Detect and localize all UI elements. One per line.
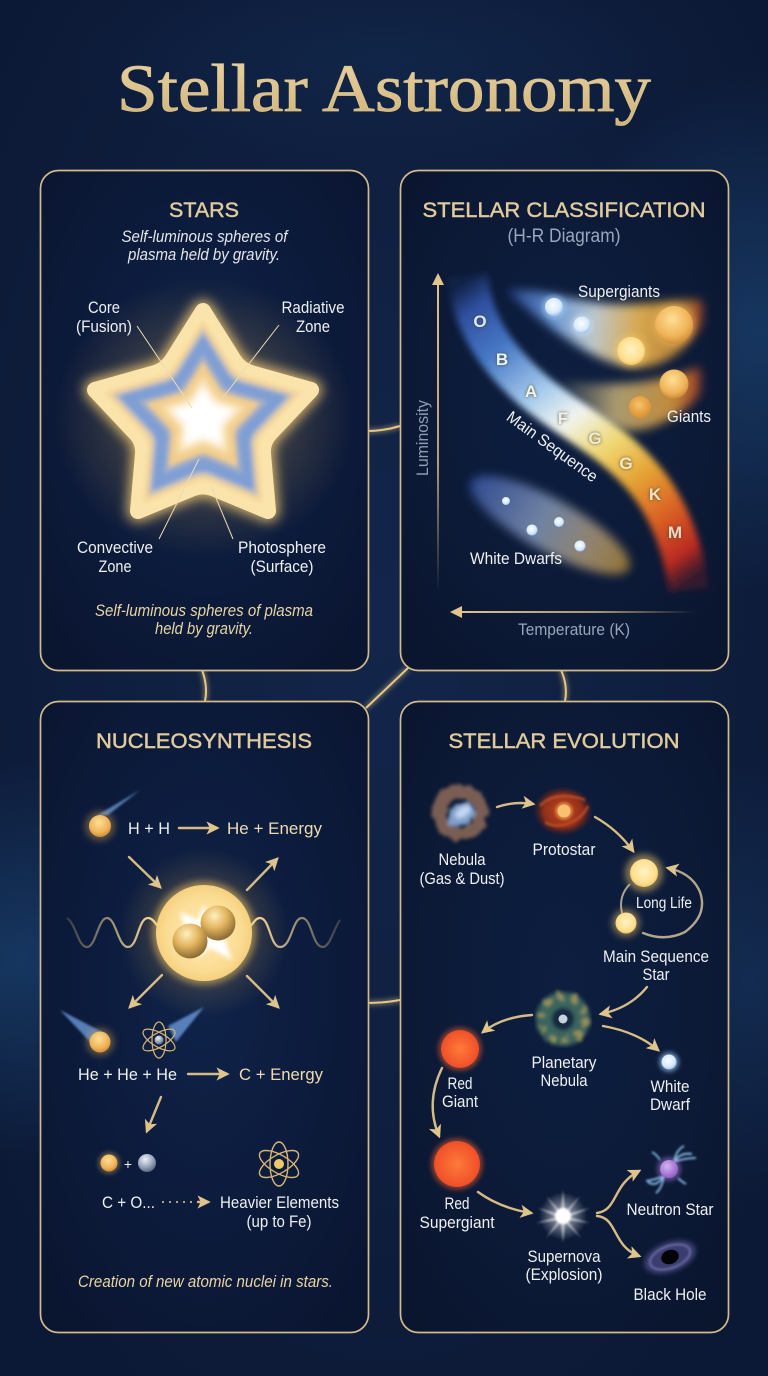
panel: stellar classification (400, 170, 728, 670)
label: core: Core (88, 299, 120, 317)
label: heavier elements (220, 1194, 339, 1231)
icon: black hole (639, 1234, 701, 1280)
arrow: nebula to red giant (483, 1015, 532, 1032)
label: supernova (526, 1248, 602, 1284)
spectral class letters: A (525, 382, 537, 401)
giants band (558, 367, 700, 430)
stars description: Self-luminous spheres of (122, 228, 290, 246)
carbon and oxygen spheres (98, 1152, 156, 1174)
arrow: supernova to neutron star (597, 1171, 639, 1213)
stars caption (95, 602, 313, 638)
label: nebula: (Gas & Dust) (420, 870, 504, 888)
comet: helium (60, 1010, 114, 1056)
label: neutron star: Neutron Star (626, 1201, 714, 1219)
label: convective zone (77, 539, 153, 576)
label: red giant (442, 1075, 478, 1111)
label: main sequence: Main Sequence (503, 408, 601, 486)
spectral class letters: O (473, 312, 487, 331)
stars description (122, 228, 290, 264)
spectral class letters: M (668, 523, 682, 542)
energy waves (67, 918, 340, 947)
icon: supernova (536, 1190, 590, 1243)
heading: nucleosynthesis: NUCLEOSYNTHESIS (96, 730, 312, 753)
arrow: red supergiant to supernova (478, 1192, 531, 1213)
label: red giant: Red (448, 1075, 472, 1093)
arrow: protostar to main sequence (595, 817, 633, 851)
icon: nebula (439, 791, 481, 833)
carbon and oxygen spheres: + (124, 1156, 132, 1172)
equation: triple alpha: He + He + He (78, 1066, 177, 1084)
arrow down (147, 1097, 161, 1131)
heading: stars: STARS (169, 199, 239, 222)
spectral class letters: K (649, 485, 662, 504)
icon: planetary nebula (541, 997, 585, 1041)
icon: white dwarf (659, 1052, 679, 1072)
white dwarfs band (459, 459, 641, 591)
luminosity axis: Luminosity (414, 399, 432, 476)
panel: stellar evolution (400, 702, 728, 1332)
label: supergiants: Supergiants (578, 283, 660, 301)
leader lines to star zones (137, 325, 279, 539)
temperature axis (450, 606, 696, 639)
subheading: H-R diagram: (H-R Diagram) (508, 226, 620, 247)
label: black hole: Black Hole (634, 1286, 706, 1304)
spectral class letters: G (619, 454, 633, 473)
spectral class letters: F (558, 409, 568, 428)
equation: C + O (102, 1194, 208, 1212)
nucleosynthesis caption: Creation of new atomic nuclei in stars. (78, 1273, 333, 1291)
arrow: supernova to black hole (597, 1216, 639, 1256)
label: heavier elements: Heavier Elements (220, 1194, 339, 1212)
equation: H + H: H + H (128, 820, 170, 838)
icon: red giant (438, 1027, 482, 1071)
label: red supergiant (420, 1195, 495, 1232)
label: radiative zone (282, 299, 344, 336)
icon: main sequence stars and cycle (612, 854, 702, 937)
title: Stellar Astronomy (117, 50, 651, 126)
arrow: nebula to protostar (497, 803, 533, 807)
temperature axis: Temperature (K) (518, 620, 630, 639)
label: supernova: Supernova (528, 1248, 601, 1266)
stars caption: Self-luminous spheres of plasma (95, 602, 313, 620)
spectral class letters: B (496, 350, 508, 369)
main sequence band (468, 276, 689, 590)
label: convective zone: Zone (98, 558, 132, 576)
label: white dwarf (650, 1078, 690, 1114)
heading: stellar evolution: STELLAR EVOLUTION (448, 730, 680, 753)
label: planetary nebula: Nebula (540, 1072, 588, 1090)
equation: H + H: He + Energy (227, 820, 323, 838)
label: white dwarfs: White Dwarfs (470, 550, 562, 568)
label: supernova: (Explosion) (526, 1266, 602, 1284)
fusion core (67, 848, 340, 1018)
icon: protostar (533, 786, 593, 836)
label: red giant: Giant (442, 1093, 478, 1111)
arrow: red giant to red supergiant (433, 1068, 442, 1136)
label: main sequence star: Main Sequence (603, 948, 709, 966)
label: red supergiant: Red (444, 1195, 470, 1213)
arrow: main sequence to planetary nebula (601, 987, 647, 1014)
label: nebula (420, 851, 504, 888)
label: planetary nebula (532, 1054, 597, 1090)
label: main sequence star (603, 948, 709, 984)
comet: hydrogen (85, 790, 140, 841)
label: giants: Giants (667, 408, 711, 426)
connector lines between panels (202, 426, 566, 1003)
icon: red supergiant (431, 1138, 483, 1190)
label: photosphere (238, 539, 326, 576)
equation: triple alpha: C + Energy (239, 1066, 324, 1084)
label: white dwarf: Dwarf (650, 1096, 690, 1114)
atom with comet tail (140, 1007, 204, 1058)
label: radiative zone: Radiative (282, 299, 344, 317)
label: long life: Long Life (636, 895, 692, 912)
spectral class letters (473, 312, 682, 542)
H-R diagram chart (414, 273, 711, 639)
stars description: plasma held by gravity. (127, 246, 280, 264)
reaction arrows (129, 857, 278, 1007)
label: white dwarf: White (650, 1078, 690, 1096)
label: core: (Fusion) (76, 318, 132, 336)
equation: C + O: C + O... (102, 1194, 155, 1212)
label: radiative zone: Zone (296, 318, 330, 336)
panel: stars (40, 170, 368, 670)
label: red supergiant: Supergiant (420, 1214, 495, 1232)
icon: neutron star (646, 1146, 696, 1193)
spectral class letters: G (588, 429, 602, 448)
panel: nucleosynthesis (40, 702, 368, 1332)
supergiants band (507, 290, 702, 367)
label: convective zone: Convective (77, 539, 153, 557)
atom: heavier elements (255, 1142, 303, 1186)
luminosity axis (414, 273, 444, 592)
stars caption: held by gravity. (155, 620, 253, 638)
label: heavier elements: (up to Fe) (246, 1213, 312, 1231)
label: photosphere: (Surface) (250, 558, 314, 576)
equation: H + H (128, 820, 323, 838)
equation: triple alpha (78, 1066, 324, 1084)
label: planetary nebula: Planetary (532, 1054, 597, 1072)
label: protostar: Protostar (532, 841, 596, 859)
label: photosphere: Photosphere (238, 539, 326, 557)
label: core (76, 299, 132, 336)
arrow: nebula to white dwarf (603, 1026, 658, 1050)
label: nebula: Nebula (438, 851, 486, 869)
heading: stellar classification: STELLAR CLASSIFICATION (422, 199, 706, 222)
label: main sequence star: Star (642, 966, 670, 984)
star cross-section diagram (54, 278, 354, 558)
